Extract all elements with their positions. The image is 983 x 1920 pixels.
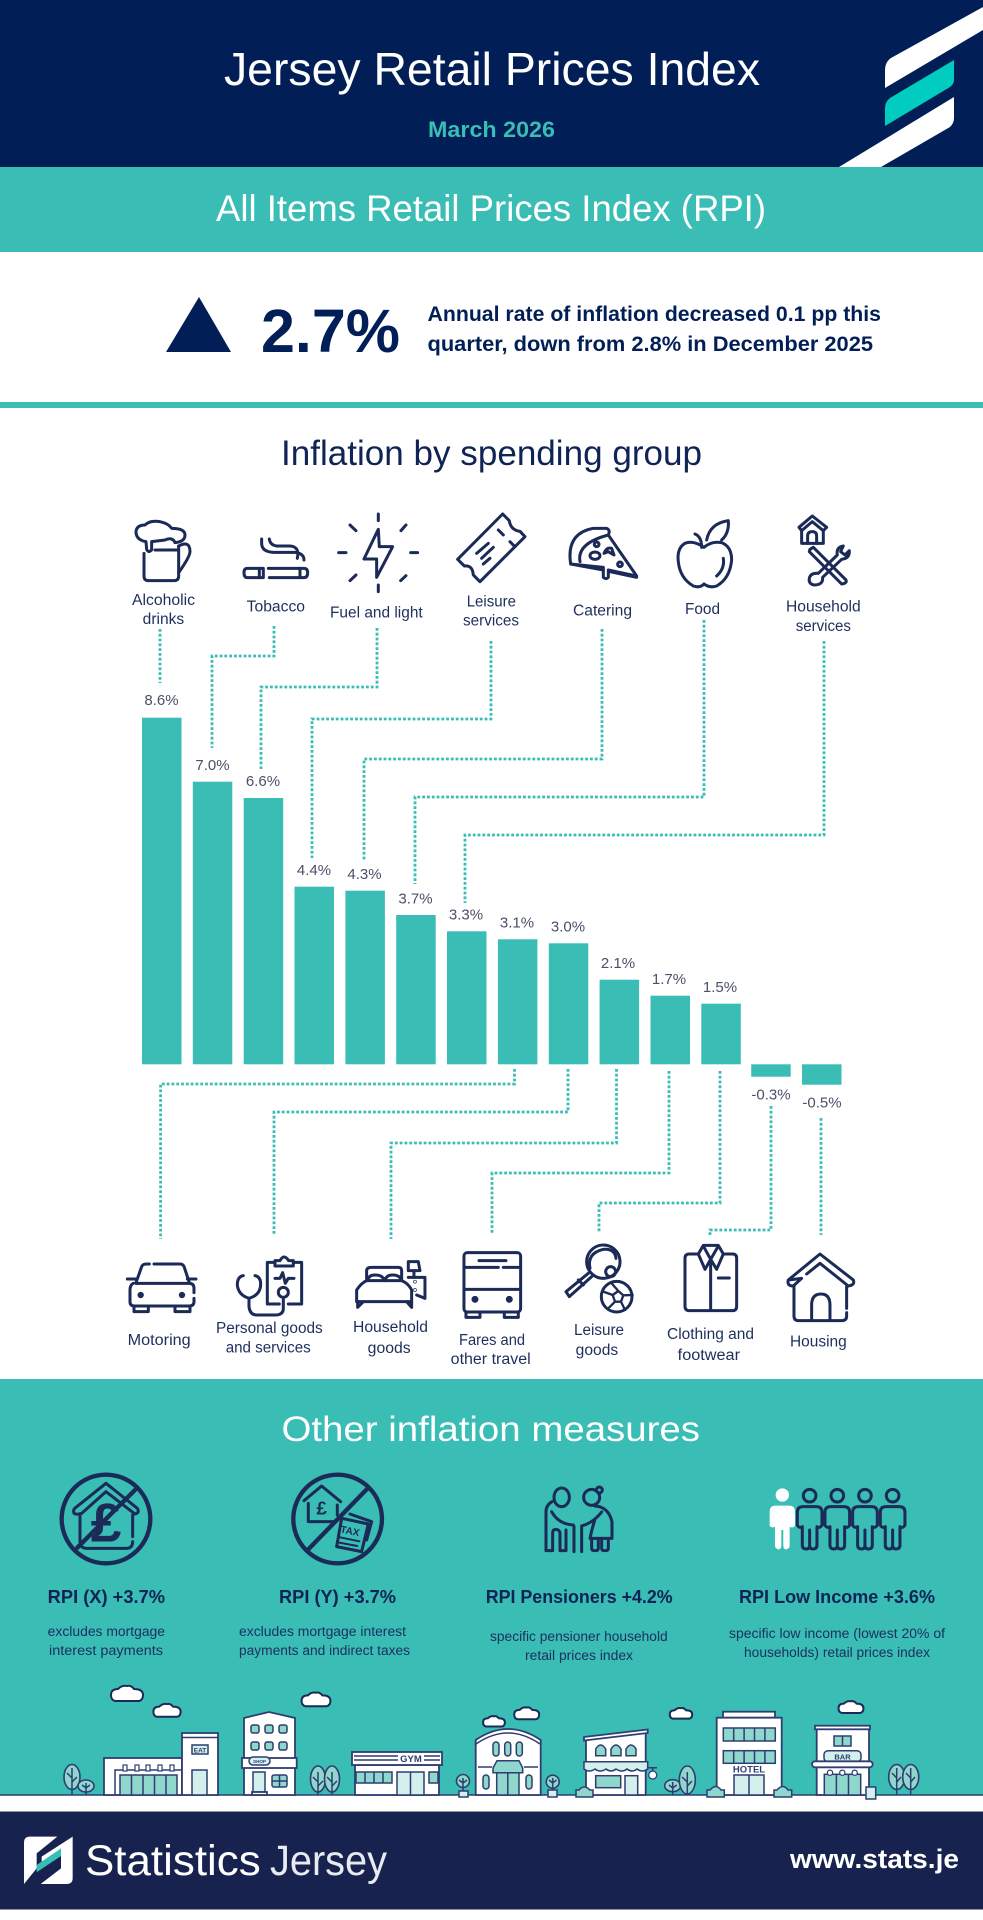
label: alcoholic drinks: drinks <box>143 611 184 628</box>
icon: car <box>127 1264 196 1312</box>
RPI X description: interest payments <box>49 1643 163 1658</box>
icon: five people, one highlighted <box>770 1488 905 1549</box>
street illustration <box>64 1686 919 1799</box>
bar value labels: 3.7% <box>398 890 433 907</box>
label: leisure services: Leisure <box>467 594 516 611</box>
clouds <box>111 1686 863 1726</box>
building: eat: EAT <box>194 1747 206 1754</box>
RPI low income description: households) retail prices index <box>744 1645 930 1660</box>
bar value labels: 1.7% <box>652 971 686 988</box>
headline description: Annual rate of inflation decreased 0.1 pp this <box>428 302 881 326</box>
icon: house <box>788 1254 854 1321</box>
building: shop: SHOP <box>253 1759 266 1764</box>
building: arched <box>476 1729 541 1795</box>
icon: shirt <box>685 1245 737 1311</box>
icon: up triangle <box>166 297 231 352</box>
label: alcoholic drinks: Alcoholic <box>132 592 195 609</box>
building: bar <box>812 1726 876 1799</box>
building: gym <box>352 1752 442 1795</box>
RPI low income description <box>729 1626 945 1660</box>
connector lines: bottom categories <box>161 1069 821 1239</box>
icon: no mortgage or tax: TAX <box>339 1524 361 1539</box>
panel: other inflation measures <box>0 1379 983 1795</box>
building: gym: GYM <box>400 1754 422 1765</box>
bar value labels: 1.5% <box>703 979 737 996</box>
RPI Y description: excludes mortgage interest <box>239 1624 406 1639</box>
icon: ticket <box>458 514 525 582</box>
RPI Y description <box>239 1624 410 1658</box>
label: leisure goods: Leisure <box>574 1322 624 1339</box>
bar value labels: -0.3% <box>751 1086 791 1103</box>
panel: header <box>0 0 983 167</box>
building: hotel <box>717 1712 782 1795</box>
label: catering: Catering <box>573 603 632 620</box>
label: household goods <box>353 1319 428 1357</box>
icon: racket and football <box>566 1238 633 1312</box>
hotel planters <box>707 1786 792 1797</box>
label: clothing and footwear <box>667 1326 754 1364</box>
flower pots <box>459 1790 557 1797</box>
bar value labels: 6.6% <box>246 773 280 790</box>
heading: all items: All Items Retail Prices Index (RPI) <box>216 188 766 229</box>
label: clothing and footwear: footwear <box>678 1347 740 1364</box>
building: shop <box>242 1712 297 1795</box>
heading: other inflation measures: Other inflation measures <box>282 1410 700 1449</box>
RPI pensioners description: retail prices index <box>525 1648 633 1663</box>
heading: inflation by spending group: Inflation by spending group <box>281 434 702 473</box>
bars <box>142 718 842 1085</box>
ground strip <box>0 1795 983 1812</box>
label: leisure goods <box>574 1322 624 1359</box>
label: fares and other travel: other travel <box>451 1351 531 1368</box>
icon: pensioners <box>546 1487 612 1552</box>
headline description: quarter, down from 2.8% in December 2025 <box>428 332 873 356</box>
RPI low income title: RPI Low Income +3.6% <box>739 1587 935 1607</box>
icon: bus <box>464 1253 521 1317</box>
building: slanted shop <box>584 1730 657 1795</box>
icon: no mortgage or tax: £ <box>316 1497 327 1518</box>
label: housing: Housing <box>790 1334 847 1351</box>
label: motoring: Motoring <box>128 1332 191 1349</box>
bar value labels: 3.0% <box>551 919 585 936</box>
bar value labels: 2.1% <box>601 955 635 972</box>
label: personal goods and services <box>216 1320 323 1357</box>
wordmark: Jersey <box>270 1837 387 1885</box>
bar chart <box>142 692 842 1112</box>
icon: clipboard and stethoscope <box>237 1257 302 1315</box>
trees <box>64 1764 919 1795</box>
RPI pensioners title: RPI Pensioners +4.2% <box>486 1587 673 1607</box>
label: household goods: Household <box>353 1319 428 1336</box>
RPI pensioners description: specific pensioner household <box>490 1629 668 1644</box>
RPI Y title: RPI (Y) +3.7% <box>279 1587 396 1607</box>
RPI X title: RPI (X) +3.7% <box>48 1587 165 1607</box>
logo mark <box>24 1837 73 1884</box>
label: food: Food <box>685 601 720 618</box>
icon: apple <box>678 521 732 587</box>
label: leisure services <box>463 594 519 630</box>
building: hotel: HOTEL <box>733 1765 765 1776</box>
icon: pizza <box>570 528 637 579</box>
label: leisure services: services <box>463 613 519 630</box>
bar value labels <box>144 692 842 1112</box>
label: household services: services <box>796 618 851 635</box>
label: household goods: goods <box>368 1340 411 1357</box>
RPI X description: excludes mortgage <box>48 1624 165 1639</box>
label: fuel and light: Fuel and light <box>330 605 423 622</box>
label: clothing and footwear: Clothing and <box>667 1326 754 1343</box>
panel: footer <box>0 1812 983 1910</box>
building: eat <box>104 1733 218 1795</box>
RPI pensioners description <box>490 1629 668 1663</box>
bar value labels: 4.4% <box>297 862 331 879</box>
icon: lightning <box>339 514 418 592</box>
RPI Y description: payments and indirect taxes <box>239 1643 410 1658</box>
bar value labels: 4.3% <box>347 866 382 883</box>
label: personal goods and services: Personal goods <box>216 1320 323 1337</box>
headline description <box>428 302 881 356</box>
bar value labels: 3.1% <box>500 914 534 931</box>
label: personal goods and services: and services <box>226 1340 311 1357</box>
connector lines: top categories <box>160 620 824 903</box>
wordmark <box>85 1837 387 1885</box>
headline number: 2.7% <box>261 297 400 365</box>
title: Jersey Retail Prices Index <box>224 43 760 95</box>
icon: no mortgage or tax <box>293 1475 382 1563</box>
label: fares and other travel: Fares and <box>459 1332 525 1349</box>
logo stripes <box>839 7 983 167</box>
label: leisure goods: goods <box>576 1342 618 1359</box>
icon: house and tools <box>799 516 849 585</box>
icon: bed and lamp <box>357 1262 425 1307</box>
RPI low income description: specific low income (lowest 20% of <box>729 1626 945 1641</box>
wordmark: Statistics <box>85 1837 261 1885</box>
icon: no mortgage: £ <box>91 1492 122 1554</box>
date: March 2026 <box>428 117 555 142</box>
bar value labels: 7.0% <box>195 757 230 774</box>
planter <box>576 1787 593 1797</box>
bar value labels: -0.5% <box>802 1095 842 1112</box>
panel: all items heading band <box>0 167 983 252</box>
panel: headline rate <box>166 297 881 365</box>
bar value labels: 3.3% <box>449 906 483 923</box>
website: www.stats.je <box>789 1844 959 1874</box>
icon: beer mug <box>136 521 190 581</box>
label: household services <box>786 599 861 635</box>
RPI X description <box>48 1624 165 1658</box>
label: household services: Household <box>786 599 861 616</box>
label: fares and other travel <box>451 1332 531 1368</box>
label: alcoholic drinks <box>132 592 195 628</box>
icon: cigarette <box>244 539 308 578</box>
building: bar: BAR <box>834 1752 851 1762</box>
bar value labels: 8.6% <box>144 692 179 709</box>
icon: no mortgage <box>62 1475 150 1563</box>
label: tobacco: Tobacco <box>247 599 305 616</box>
